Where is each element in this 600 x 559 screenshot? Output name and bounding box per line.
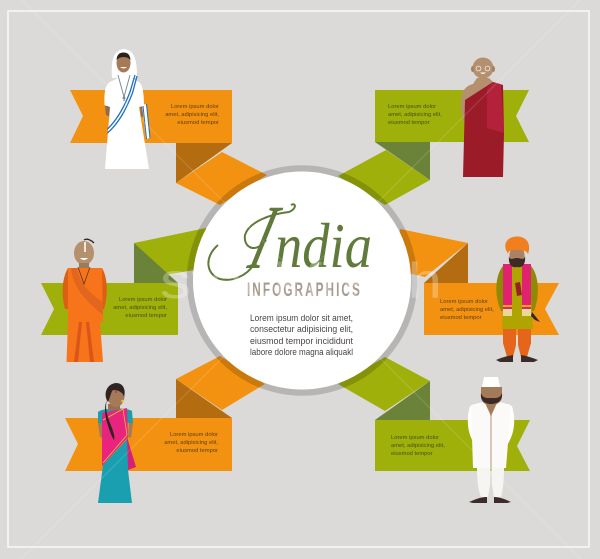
title: India: ndia	[275, 211, 372, 281]
figure: sikh man with turban	[496, 236, 540, 362]
ribbon text: top right: Lorem ipsum dolor	[388, 104, 436, 110]
ribbon text: bottom right: amet, adipisicing elit,	[391, 443, 445, 449]
ribbon text: top left: Lorem ipsum dolor	[171, 104, 219, 110]
ribbon: bottom right green	[338, 357, 530, 471]
ribbon text: bottom right: Lorem ipsum dolor	[391, 435, 439, 441]
ribbon text: middle right	[440, 299, 494, 321]
ribbon: top left orange	[70, 90, 267, 205]
figure: nun in white sari	[104, 49, 150, 169]
title: India	[208, 187, 372, 289]
ribbon text: bottom right: eiusmod tempor	[391, 451, 433, 457]
ribbon text: bottom right	[391, 435, 445, 457]
ribbon text: bottom left	[164, 432, 218, 454]
central paragraph: labore dolore magna aliquakl	[250, 347, 353, 357]
ribbon text: top left	[165, 104, 219, 126]
ribbon text: middle right: Lorem ipsum dolor	[440, 299, 488, 305]
ribbon text: bottom left: Lorem ipsum dolor	[170, 432, 218, 438]
central paragraph	[250, 313, 353, 357]
ribbon text: middle right: eiusmod tempor	[440, 315, 482, 321]
ribbon text: middle right: amet, adipisicing elit,	[440, 307, 494, 313]
central paragraph: consectetur adipisicing elit,	[250, 324, 353, 334]
figure: man in white kurta and cap	[468, 377, 514, 503]
ribbon: top right green	[338, 90, 529, 205]
ribbon: bottom left orange	[65, 356, 265, 471]
ribbon text: bottom left: eiusmod tempor	[176, 448, 218, 454]
figure: monk in red robe	[461, 58, 504, 177]
central circle	[190, 168, 414, 392]
central paragraph: eiusmod tempor incididunt	[250, 336, 353, 346]
ribbon text: bottom left: amet, adipisicing elit,	[164, 440, 218, 446]
figure: woman in pink and teal sari	[98, 383, 136, 503]
ribbon text: top right	[388, 104, 442, 126]
ribbon text: top left: eiusmod tempor	[177, 120, 219, 126]
ribbon text: top right: eiusmod tempor	[388, 120, 430, 126]
ribbon: middle left green	[41, 228, 206, 335]
ribbon text: middle left: amet, adipisicing elit,	[113, 305, 167, 311]
ribbon text: top left: amet, adipisicing elit,	[165, 112, 219, 118]
ribbon text: top right: amet, adipisicing elit,	[388, 112, 442, 118]
ribbon text: middle left	[113, 297, 167, 319]
ribbon: middle right orange	[395, 229, 559, 335]
ribbon text: middle left: eiusmod tempor	[125, 313, 167, 319]
title: India: I	[239, 187, 290, 289]
figure: orange robed priest	[63, 239, 107, 362]
watermark: stockfresh: stockfresh	[160, 253, 442, 309]
subtitle: Infographics: INFOGRAPHICS	[247, 280, 360, 301]
central paragraph: Lorem ipsum dolor sit amet,	[250, 313, 353, 323]
ribbon text: middle left: Lorem ipsum dolor	[119, 297, 167, 303]
